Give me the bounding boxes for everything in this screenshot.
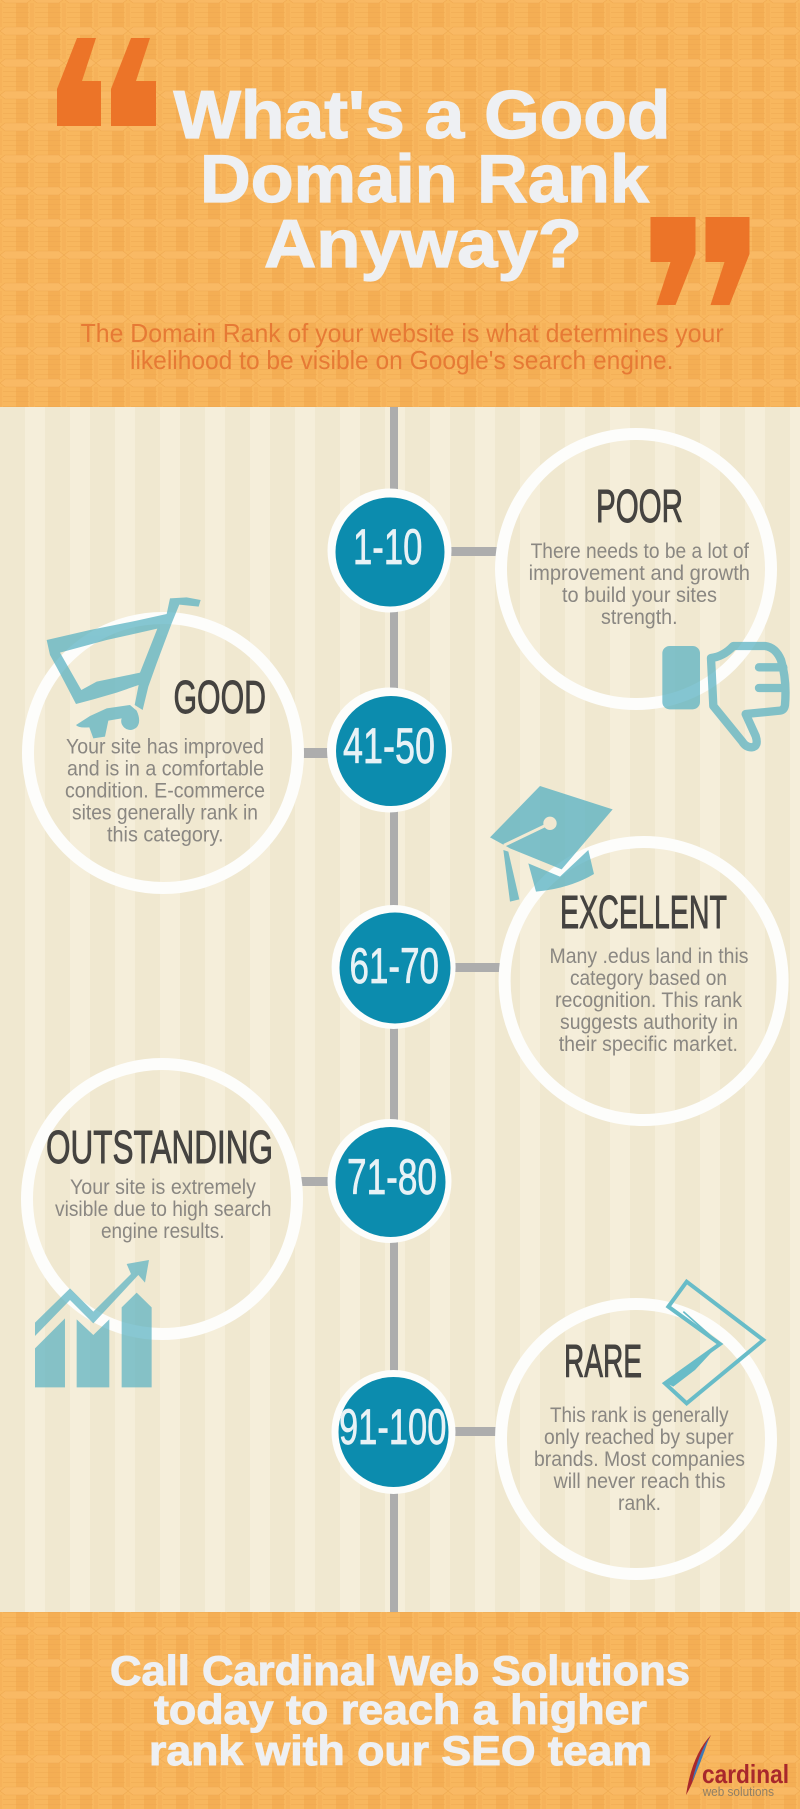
logo: cardinal web solutions: cardinal	[702, 1759, 789, 1789]
panel: good	[28, 597, 329, 888]
icon: growth chart	[35, 1260, 152, 1387]
text block: good: and is in a comfortable	[67, 758, 264, 780]
panel: excellent	[455, 786, 783, 1120]
text block: outstanding: engine results.	[101, 1220, 224, 1243]
logo: cardinal web solutions	[686, 1735, 789, 1799]
panel: outstanding	[27, 1064, 329, 1387]
text block: excellent: category based on	[570, 967, 727, 990]
connector	[455, 963, 501, 972]
timeline spine	[390, 407, 398, 1612]
call to action: Call Cardinal Web Solutions	[110, 1647, 690, 1694]
connector	[302, 748, 329, 758]
node: 91-100	[332, 1370, 456, 1494]
icon: closing quote mark	[650, 217, 750, 305]
text block: good: Your site has improved	[66, 736, 264, 758]
node: 71-80	[328, 1119, 452, 1243]
text block: excellent: suggests authority in	[560, 1011, 738, 1034]
text block: rare: only reached by super	[544, 1426, 734, 1449]
text block: excellent: Many .edus land in this	[550, 945, 748, 968]
title: Domain Rank	[200, 141, 649, 217]
text block: excellent	[550, 945, 748, 1056]
node: 91-100: 91-100	[339, 1399, 446, 1455]
panel: header	[0, 0, 800, 407]
connector	[451, 547, 497, 556]
icon: shopping cart	[47, 597, 201, 738]
panel: poor	[451, 434, 785, 747]
heading: outstanding: OUTSTANDING	[46, 1121, 273, 1173]
subtitle	[81, 318, 724, 375]
node: 71-80: 71-80	[347, 1149, 437, 1205]
text block: good: this category.	[107, 824, 224, 846]
icon: graduation cap	[490, 786, 613, 902]
circle outline	[501, 1304, 771, 1574]
text block: rare: rank.	[618, 1492, 661, 1515]
text block: poor: improvement and growth	[529, 562, 750, 585]
text block: outstanding: Your site is extremely	[70, 1176, 256, 1199]
call to action: today to reach a higher	[154, 1686, 647, 1733]
text block: outstanding: visible due to high search	[55, 1198, 271, 1221]
text block: poor	[529, 540, 750, 629]
node: 1-10: 1-10	[353, 519, 422, 575]
heading: poor: POOR	[596, 480, 683, 532]
call to action: rank with our SEO team	[149, 1727, 652, 1774]
heading: rare: RARE	[564, 1335, 642, 1387]
title	[174, 77, 670, 282]
logo: cardinal web solutions: web solutions	[702, 1784, 774, 1799]
title: What's a Good	[174, 77, 670, 153]
icon: sketched chevron	[665, 1282, 763, 1403]
circle outline	[27, 1064, 297, 1334]
text block: poor: to build your sites	[562, 584, 717, 607]
text block: rare	[534, 1404, 745, 1515]
icon: thumbs down	[662, 646, 785, 747]
node: 41-50	[327, 688, 452, 812]
connector	[455, 1427, 497, 1436]
text block: rare: brands. Most companies	[534, 1448, 745, 1471]
panel: rare	[455, 1282, 771, 1574]
node: 61-70: 61-70	[350, 938, 439, 994]
circle outline	[505, 842, 783, 1120]
text block: good	[65, 736, 265, 846]
call to action	[110, 1647, 690, 1774]
node: 61-70	[332, 905, 456, 1029]
icon: opening quote mark	[57, 38, 156, 126]
panel: timeline background	[0, 407, 800, 1612]
text block: excellent: recognition. This rank	[555, 989, 742, 1012]
heading: good: GOOD	[174, 671, 266, 723]
text block: good: sites generally rank in	[72, 802, 258, 824]
subtitle: The Domain Rank of your website is what determines your	[81, 318, 724, 348]
circle outline	[28, 618, 298, 888]
connector	[291, 1177, 329, 1186]
circle outline	[501, 434, 771, 704]
node: 41-50: 41-50	[343, 718, 435, 774]
title: Anyway?	[264, 206, 582, 282]
text block: rare: This rank is generally	[550, 1404, 729, 1427]
text block: poor: strength.	[601, 606, 678, 629]
node: 1-10	[328, 488, 452, 612]
subtitle: likelihood to be visible on Google's search engine.	[130, 345, 674, 375]
text block: outstanding	[55, 1176, 271, 1243]
text block: excellent: their specific market.	[559, 1033, 738, 1056]
text block: poor: There needs to be a lot of	[531, 540, 749, 563]
panel: footer	[0, 1612, 800, 1809]
text block: rare: will never reach this	[553, 1470, 726, 1493]
text block: good: condition. E-commerce	[65, 780, 265, 802]
